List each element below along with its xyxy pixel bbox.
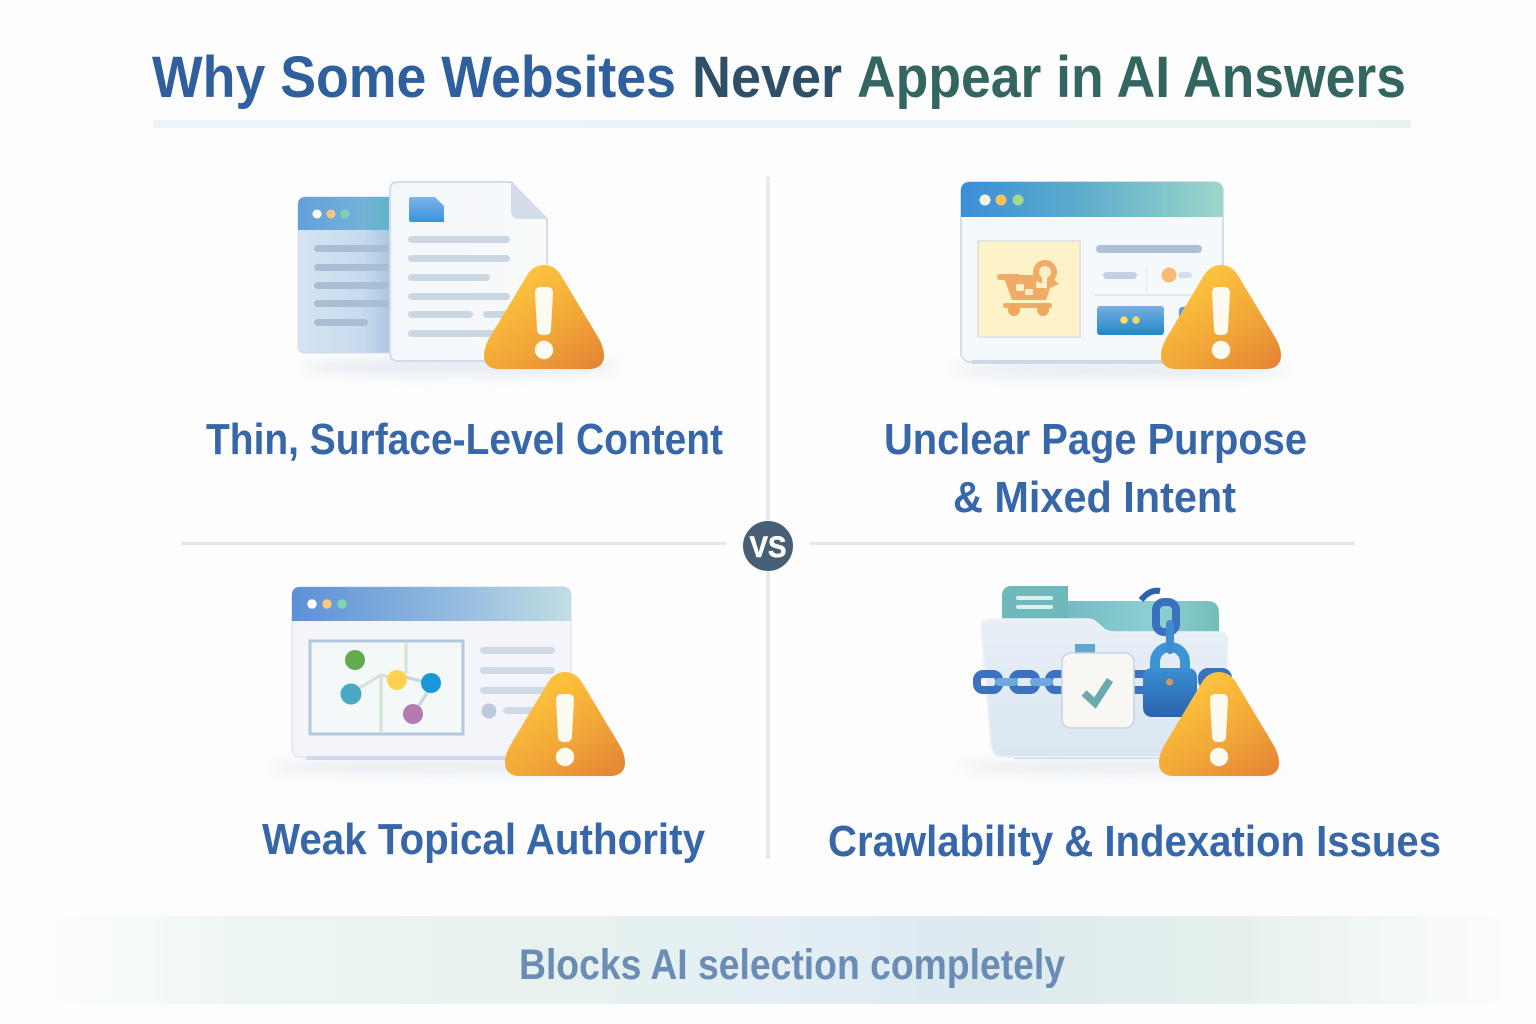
chain bbox=[977, 672, 1228, 690]
panel: thin content bbox=[206, 182, 723, 464]
icon: topic map with warning bbox=[270, 587, 625, 776]
panel: weak authority bbox=[262, 587, 705, 864]
icon: shopping cart bbox=[997, 263, 1059, 316]
footer banner bbox=[40, 916, 1510, 1004]
icon: web page with cart and warning bbox=[950, 182, 1290, 379]
icon: chained folder with lock and warning bbox=[960, 586, 1280, 776]
vs badge bbox=[743, 521, 793, 571]
icon: documents with warning bbox=[298, 182, 620, 376]
heading bbox=[884, 415, 1307, 522]
heading: Crawlability & Indexation Issues bbox=[828, 817, 1441, 866]
heading: Weak Topical Authority bbox=[262, 815, 705, 864]
panel: crawlability bbox=[828, 586, 1441, 866]
vs badge: VS bbox=[750, 531, 786, 564]
title: Why Some Websites bbox=[152, 45, 676, 110]
heading: Unclear Page Purpose bbox=[884, 415, 1307, 464]
heading: & Mixed Intent bbox=[953, 473, 1236, 522]
panel: unclear purpose bbox=[884, 182, 1307, 522]
footer banner: Blocks AI selection completely bbox=[519, 941, 1065, 989]
title bbox=[152, 45, 1406, 110]
title: Never bbox=[692, 45, 842, 110]
heading: Thin, Surface-Level Content bbox=[206, 415, 723, 464]
title: Appear in AI Answers bbox=[857, 45, 1406, 110]
